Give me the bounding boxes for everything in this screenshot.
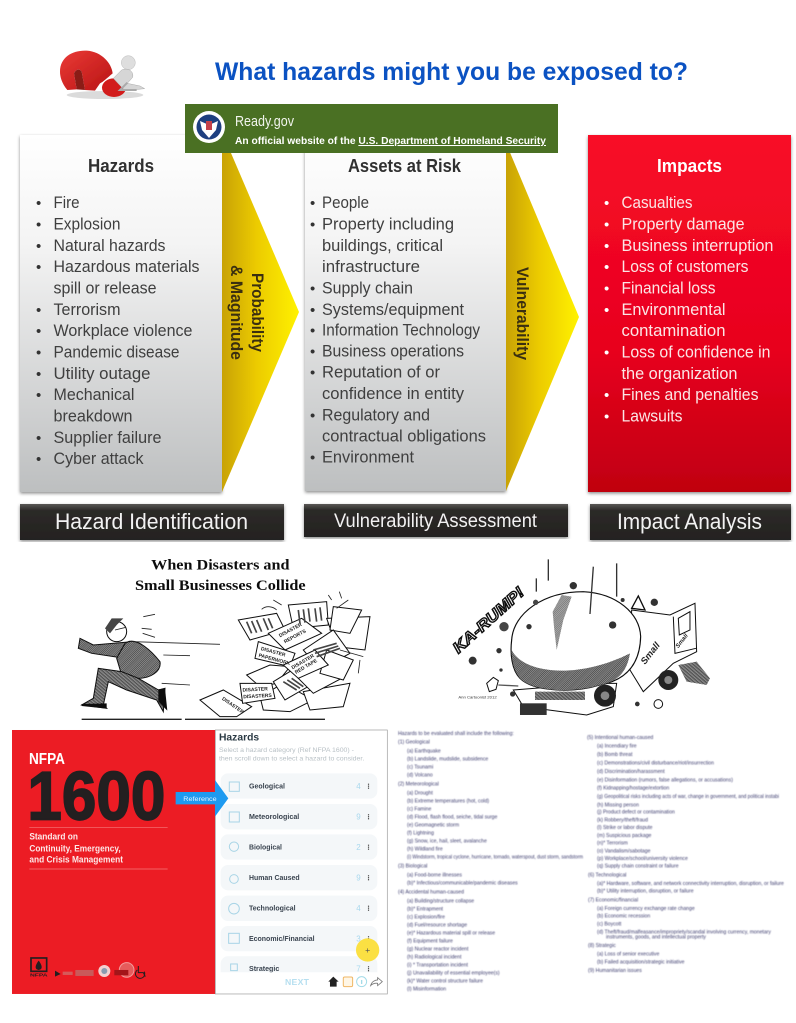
- label bar: vulnerability assessment: [304, 504, 568, 537]
- panel: nfpa 1600 cover: [12, 730, 215, 994]
- hazards list: Natural hazards: [54, 236, 166, 255]
- text block: nfpa hazards list right column: (l) Strike or labor dispute: [597, 825, 653, 831]
- paper pile: DISASTER: [221, 696, 245, 716]
- text block: nfpa hazards list right column: (c) Demonstrations/civil disturbance/riot/insurrection: [597, 761, 714, 767]
- icon: dhs seal: [193, 111, 225, 143]
- impacts list: Financial loss: [622, 278, 716, 298]
- assets list: •: [310, 216, 315, 234]
- assets list: Regulatory and: [322, 406, 430, 424]
- text block: nfpa hazards list left column: (h) Wildland fire: [407, 847, 443, 853]
- text block: nfpa hazards list right column: (m) Suspicious package: [597, 833, 652, 839]
- text block: nfpa hazards list right column: (h) Missing person: [597, 802, 639, 808]
- hazard category rows: 9: [356, 873, 361, 882]
- text block: nfpa hazards list left column: (a) Building/structure collapse: [407, 899, 474, 905]
- hazards list: •: [36, 344, 41, 362]
- text block: nfpa hazards list left column: (3) Biological: [398, 864, 427, 870]
- impacts list: Loss of customers: [622, 257, 748, 276]
- hazards list: •: [36, 323, 41, 340]
- hazards list: Workplace violence: [54, 321, 192, 340]
- hazard category rows: 4: [356, 782, 361, 791]
- assets list: •: [310, 302, 315, 319]
- text block: nfpa hazards list left column: (j) Unavailability of essential employee(s): [407, 971, 500, 977]
- paper pile: DISASTER: [242, 686, 268, 694]
- panel: nfpa 1600 cover: NFPA: [29, 751, 65, 768]
- logos row: [30, 958, 145, 978]
- hazards list: spill or release: [54, 278, 156, 298]
- hazard category rows: ⁝: [367, 782, 370, 791]
- paper pile: [200, 592, 370, 717]
- impacts list: Loss of confidence in: [622, 342, 770, 362]
- arrow: probability and magnitude: [222, 132, 299, 492]
- heading: hazards: Hazards: [88, 156, 154, 176]
- text block: nfpa hazards list right column: (g) Geopolitical risks including acts of war, change in government, and political instabi: [597, 794, 779, 800]
- assets list: buildings, critical: [322, 236, 443, 255]
- van: [513, 596, 710, 715]
- text block: nfpa hazards list right column: [587, 735, 784, 974]
- hazards list: Hazardous materials: [54, 257, 200, 276]
- ground lines: [82, 717, 325, 721]
- arrow: probability and magnitude: & Magnitude: [227, 265, 245, 360]
- text block: nfpa hazards list right column: (d) Theft/fraud/malfeasance/impropriety/scandal involving currency, monetary: [597, 929, 771, 935]
- text block: nfpa hazards list right column: (a)* Hardware, software, and network connectivity interruption, disruption, or failure: [597, 881, 784, 887]
- impacts list: •: [604, 216, 609, 234]
- text block: nfpa hazards list right column: (o) Vandalism/sabotage: [597, 848, 651, 854]
- panel: assets at risk: [305, 135, 506, 491]
- text block: nfpa hazards list left column: (1) Geological: [398, 740, 430, 746]
- text block: nfpa hazards list left column: (f) Lightning: [407, 831, 434, 837]
- text block: nfpa hazards list left column: (2) Meteorological: [398, 781, 439, 787]
- next link: NEXT: [285, 977, 310, 987]
- panel: hazards app screen: then scroll down to select a hazard to consider.: [219, 755, 365, 762]
- title: What hazards might you be exposed to?: [215, 58, 688, 86]
- panel: nfpa 1600 cover: 1600: [27, 758, 165, 834]
- cartoon heading: [135, 557, 306, 594]
- hazard category rows: Biological: [249, 844, 282, 851]
- text block: nfpa hazards list right column: (f) Kidnapping/hostage/extortion: [597, 785, 669, 791]
- paper pile: PAPERWORK: [258, 653, 291, 667]
- impacts list: •: [604, 238, 609, 255]
- hazard category rows: ⁝: [367, 904, 370, 913]
- label bar: impact analysis: Impact Analysis: [617, 509, 762, 534]
- text block: nfpa hazards list left column: (c) Explosion/fire: [407, 915, 445, 921]
- logos row: NFPA: [30, 973, 49, 978]
- assets list: •: [310, 364, 315, 382]
- assets list: Business operations: [322, 342, 464, 360]
- text block: nfpa hazards list left column: Hazards to be evaluated shall include the following:: [398, 731, 514, 737]
- hazards list: breakdown: [54, 406, 132, 426]
- text block: nfpa hazards list right column: (b) Failed acquisition/strategic initiative: [597, 959, 685, 965]
- van: Small: [675, 633, 690, 650]
- banner: ready.gov: Ready.gov: [235, 114, 295, 130]
- assets list: Information Technology: [322, 320, 480, 340]
- text block: nfpa hazards list right column: (7) Economic/financial: [588, 897, 638, 903]
- text block: nfpa hazards list left column: (b)* Infectious/communicable/pandemic diseases: [407, 881, 518, 887]
- text block: nfpa hazards list right column: (k) Robbery/theft/fraud: [597, 817, 648, 823]
- text block: nfpa hazards list left column: (b) Extreme temperatures (hot, cold): [407, 798, 489, 804]
- assets list: Supply chain: [322, 278, 413, 298]
- impacts list: the organization: [622, 364, 738, 383]
- text block: nfpa hazards list left column: (d) Volcano: [407, 773, 433, 779]
- assets list: Reputation of or: [322, 362, 440, 382]
- heading: assets at risk: Assets at Risk: [348, 156, 462, 176]
- arrow: reference: [176, 780, 228, 817]
- paper pile: DISASTER: [278, 622, 304, 639]
- text block: nfpa hazards list left column: (d) Fuel/resource shortage: [407, 923, 467, 929]
- banner: ready.gov: An official website of the U.S. Department of Homeland Security: [235, 136, 546, 147]
- hazards list: •: [36, 238, 41, 255]
- toolbar icons: [328, 977, 382, 987]
- label bar: impact analysis: [590, 504, 791, 540]
- assets list: People: [322, 193, 369, 212]
- text block: nfpa hazards list left column: (i) Windstorm, tropical cyclone, hurricane, tornado, waterspout, dust storm, sandstorm: [407, 855, 583, 861]
- hazard category rows: ⁝: [367, 843, 370, 852]
- impacts list: Environmental: [622, 300, 726, 319]
- text block: nfpa hazards list left column: (4) Accidental human-caused: [398, 890, 464, 896]
- text block: nfpa hazards list right column: (a) Incendiary fire: [597, 744, 637, 750]
- panel: hazards: [20, 135, 222, 492]
- impacts list: •: [604, 280, 609, 298]
- assets list: •: [310, 322, 315, 340]
- text block: nfpa hazards list right column: (e) Disinformation (rumors, false allegations, or accusations): [597, 777, 733, 783]
- impacts list: •: [604, 302, 609, 319]
- heading: impacts: Impacts: [657, 156, 722, 176]
- text block: nfpa hazards list right column: (b) Economic recession: [597, 914, 650, 920]
- impacts list: •: [604, 195, 609, 212]
- banner: ready.gov: [185, 104, 558, 153]
- text block: nfpa hazards list left column: (i) * Transportation incident: [407, 963, 468, 969]
- hazard category rows: ⁝: [367, 812, 370, 821]
- hazard category rows: Human Caused: [249, 875, 300, 882]
- hazards list: Terrorism: [54, 300, 120, 319]
- text block: nfpa hazards list right column: (b) Bomb threat: [597, 752, 633, 758]
- cartoon heading: When Disasters and: [151, 557, 290, 573]
- panel: hazards app screen: Select a hazard category (Ref NFPA 1600) -: [219, 747, 354, 754]
- text block: nfpa hazards list left column: (a) Drought: [407, 790, 433, 796]
- hazard category rows: 2: [356, 843, 361, 852]
- assets list: Environment: [322, 448, 414, 466]
- text block: nfpa hazards list right column: (j) Product defect or contamination: [597, 810, 675, 816]
- impacts list: [604, 193, 774, 426]
- assets list: •: [310, 344, 315, 360]
- arrow: vulnerability: Vulnerability: [513, 267, 531, 361]
- assets list: •: [310, 280, 315, 298]
- text block: nfpa hazards list left column: (h) Radiological incident: [407, 955, 462, 961]
- hazards list: [36, 193, 200, 468]
- hazard category rows: 7: [356, 964, 361, 973]
- label bar: hazard identification: Hazard Identification: [55, 509, 248, 534]
- text block: nfpa hazards list right column: (p) Workplace/school/university violence: [597, 856, 688, 862]
- debris and motion lines: [469, 559, 663, 708]
- paper pile: REPORTS: [283, 628, 308, 645]
- hazards list: Mechanical: [54, 385, 134, 404]
- icon: red question mark with figure: [60, 51, 145, 99]
- running man: [78, 614, 220, 712]
- hazards list: •: [36, 430, 41, 447]
- text block: nfpa hazards list left column: [398, 731, 583, 993]
- nfpa 1600 and hazards app: [12, 730, 387, 994]
- text block: nfpa hazards list right column: instruments, goods, and intellectual property: [606, 935, 706, 941]
- assets list: Property including: [322, 214, 454, 234]
- hazard category rows: Economic/Financial: [249, 936, 315, 943]
- text block: nfpa hazards list left column: (g) Snow, ice, hail, sleet, avalanche: [407, 839, 487, 845]
- text block: nfpa hazards list right column: (5) Intentional human-caused: [587, 735, 653, 741]
- text block: nfpa hazards list left column: (l) Misinformation: [407, 987, 446, 993]
- assets list: [310, 193, 486, 466]
- assets list: contractual obligations: [322, 426, 486, 446]
- text block: nfpa hazards list left column: (a) Earthquake: [407, 748, 441, 754]
- text block: nfpa hazards list right column: (6) Technological: [588, 872, 626, 878]
- cartoon: boulder crushing small business van: [450, 559, 710, 715]
- text block: nfpa hazards list right column: (q) Supply chain constraint or failure: [597, 864, 679, 870]
- ka-rump text: KA-RUMP!: [450, 584, 528, 657]
- impacts list: Casualties: [622, 193, 692, 212]
- panel: nfpa 1600 cover: and Crisis Management: [29, 855, 123, 865]
- hazard category rows: Technological: [249, 905, 296, 912]
- hazards list: •: [36, 216, 41, 234]
- arrow: vulnerability: [506, 143, 579, 491]
- arrow: probability and magnitude: Probability: [248, 273, 266, 353]
- text block: nfpa hazards list left column: (b)* Entrapment: [407, 907, 444, 913]
- label bar: hazard identification: [20, 504, 284, 540]
- text block: nfpa hazards list left column: (c) Famine: [407, 807, 432, 813]
- hazards list: Explosion: [54, 214, 120, 234]
- hazards list: Pandemic disease: [54, 342, 180, 362]
- cartoonist signature: Ann Cartoonist 2012: [458, 694, 497, 699]
- assets list: •: [310, 450, 315, 466]
- impacts list: Fines and penalties: [622, 385, 758, 404]
- text block: nfpa hazards list left column: (k)* Water control structure failure: [407, 979, 483, 985]
- label bar: vulnerability assessment: Vulnerability Assessment: [334, 511, 538, 532]
- hazards list: •: [36, 451, 41, 468]
- hazard category rows: 9: [356, 812, 361, 821]
- text block: nfpa hazards list right column: (a) Loss of senior executive: [597, 952, 659, 958]
- text block: nfpa hazards list left column: (g) Nuclear reactor incident: [407, 947, 469, 953]
- hazards list: •: [36, 259, 41, 276]
- hazard category rows: ⁝: [367, 964, 370, 973]
- add button: +: [365, 945, 370, 955]
- text block: nfpa hazards list left column: (e) Geomagnetic storm: [407, 823, 459, 829]
- hazard category rows: Meteorological: [249, 814, 299, 821]
- hazard category rows: 3: [356, 934, 361, 943]
- text block: nfpa hazards list right column: (d) Discrimination/harassment: [597, 769, 665, 775]
- assets list: •: [310, 195, 315, 212]
- text block: nfpa hazards list left column: (d) Flood, flash flood, seiche, tidal surge: [407, 814, 497, 820]
- text block: nfpa hazards list right column: (8) Strategic: [588, 943, 616, 949]
- panel: impacts: [588, 135, 791, 492]
- text block: nfpa hazards list left column: (b) Landslide, mudslide, subsidence: [407, 756, 488, 762]
- text block: nfpa hazards list right column: (a) Foreign currency exchange rate change: [597, 906, 695, 912]
- hazards list: •: [36, 366, 41, 383]
- impacts list: Property damage: [622, 214, 744, 234]
- paper pile: DISASTER: [260, 646, 286, 659]
- hazard category rows: [221, 773, 377, 982]
- hazards list: •: [36, 195, 41, 212]
- arrow: reference: Reference: [183, 796, 217, 803]
- text block: nfpa hazards list right column: (n)* Terrorism: [597, 841, 628, 847]
- van: Small: [639, 640, 662, 666]
- text block: nfpa hazards list right column: (9) Humanitarian issues: [588, 968, 642, 974]
- hazards list: Cyber attack: [54, 449, 144, 468]
- text block: nfpa hazards list left column: (a) Food-borne illnesses: [407, 873, 462, 879]
- panel: nfpa 1600 cover: Standard on: [29, 831, 78, 841]
- assets list: infrastructure: [322, 257, 420, 276]
- impacts list: •: [604, 408, 609, 426]
- assets list: Systems/equipment: [322, 300, 464, 319]
- paper pile: DISASTER: [291, 653, 316, 671]
- hazard category rows: Geological: [249, 784, 285, 791]
- impacts list: contamination: [622, 321, 726, 340]
- hazards list: Utility outage: [54, 364, 150, 383]
- hazards list: •: [36, 387, 41, 404]
- hazards list: Supplier failure: [54, 428, 162, 447]
- impacts list: Lawsuits: [622, 406, 682, 426]
- text block: nfpa hazards list right column: (c) Boycott: [597, 922, 622, 928]
- panel: hazards app screen: Hazards: [219, 733, 259, 744]
- cartoon: when disasters and small businesses collide: [78, 557, 370, 719]
- hazard category rows: ⁝: [367, 873, 370, 882]
- impacts list: •: [604, 344, 609, 362]
- text block: nfpa hazards list left column: (c) Tsunami: [407, 765, 433, 771]
- impacts list: •: [604, 259, 609, 276]
- text block: nfpa hazards list left column: (f) Equipment failure: [407, 939, 453, 945]
- paper pile: RED TAPE: [294, 658, 319, 676]
- impacts list: •: [604, 387, 609, 404]
- assets list: confidence in entity: [322, 384, 464, 403]
- cartoon heading: Small Businesses Collide: [135, 578, 306, 594]
- paper pile: DISASTERS: [243, 693, 273, 700]
- hazard category rows: ⁝: [367, 934, 370, 943]
- text block: nfpa hazards list right column: (b)* Utility interruption, disruption, or failure: [597, 889, 694, 895]
- text block: nfpa hazards list left column: (e)* Hazardous material spill or release: [407, 931, 495, 937]
- panel: nfpa 1600 cover: Continuity, Emergency,: [29, 843, 121, 853]
- impacts list: Business interruption: [622, 236, 774, 255]
- panel: hazards app screen: [215, 730, 387, 994]
- add button: [356, 938, 379, 962]
- hazard category rows: Strategic: [249, 966, 279, 973]
- hazard category rows: 4: [356, 904, 361, 913]
- assets list: •: [310, 408, 315, 424]
- hazards list: Fire: [54, 193, 80, 212]
- boulder: [511, 592, 641, 690]
- hazards list: •: [36, 302, 41, 319]
